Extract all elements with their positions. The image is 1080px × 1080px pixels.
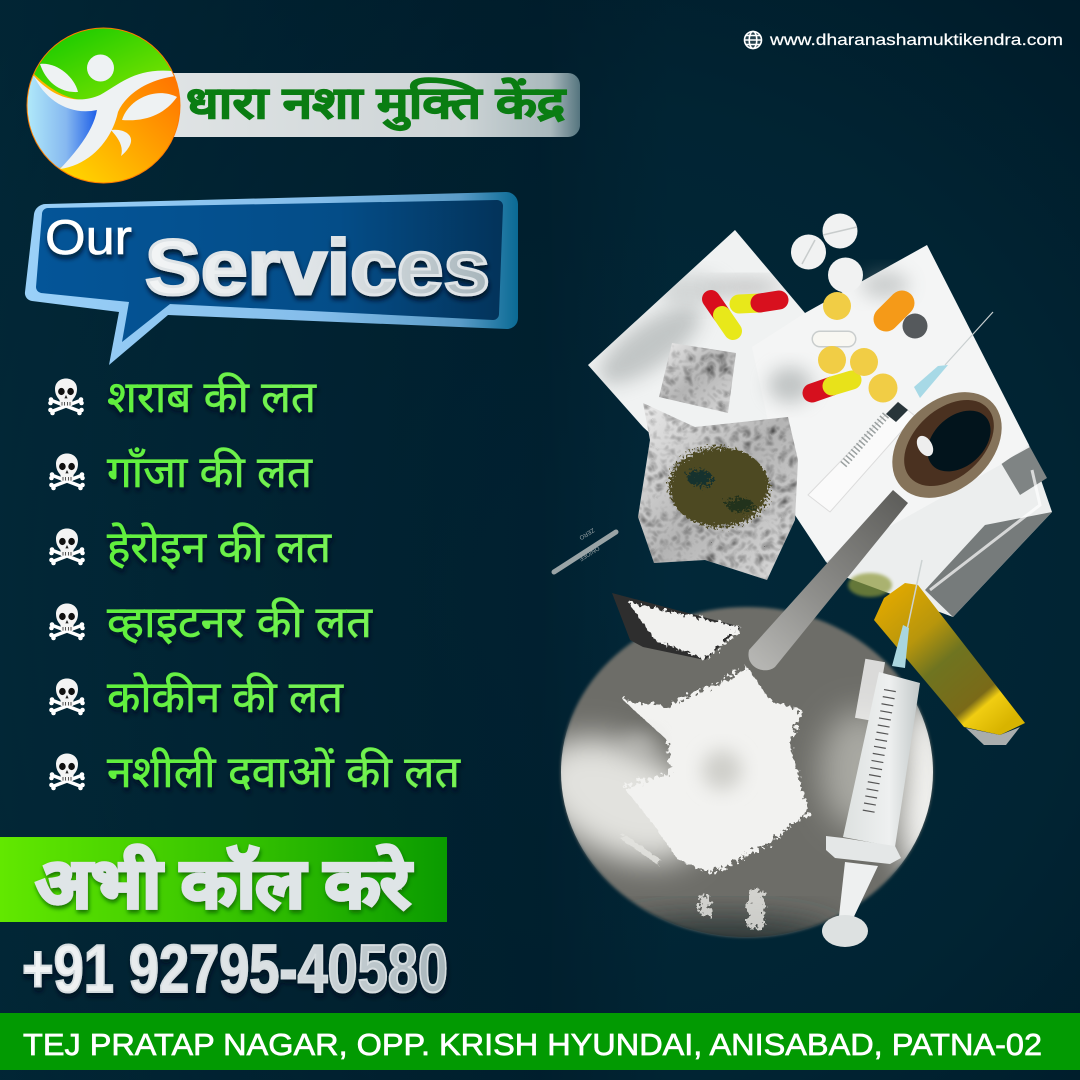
logo emblem	[26, 28, 180, 184]
lighter	[848, 573, 1025, 745]
item 1: शराब की लत	[107, 372, 317, 422]
website: www.dharanashamuktikendra.com	[769, 32, 1063, 49]
phone number: +91 92795-40580	[22, 931, 448, 1007]
call to action bar	[0, 837, 447, 922]
item 5: कोकीन की लत	[107, 672, 344, 722]
powder pile	[623, 667, 809, 873]
foil large	[638, 403, 798, 580]
capsule pills	[711, 299, 902, 393]
plastic bag	[826, 445, 1052, 617]
text: Services: Services	[145, 223, 490, 311]
powder traces	[620, 834, 764, 928]
icon: globe	[744, 32, 762, 48]
text: Our: Our	[45, 211, 132, 265]
paper: left	[588, 230, 805, 432]
digital scale: ZERO	[578, 526, 595, 540]
syringe bottom	[822, 560, 922, 947]
digital scale: ML FL.OZ	[551, 554, 577, 574]
digital scale	[551, 526, 616, 574]
paper: right	[752, 245, 1029, 562]
speech bubble heading	[25, 192, 518, 365]
item 3: हेरोइन की लत	[107, 522, 332, 572]
item 6: नशीली दवाओं की लत	[107, 747, 461, 797]
digital scale: ON/OFF	[577, 544, 600, 562]
item 2: गाँजा की लत	[107, 447, 313, 497]
logo name text: धारा नशा मुक्ति केंद्र	[186, 77, 567, 131]
address text: TEJ PRATAP NAGAR, OPP. KRISH HYUNDAI, ANISABAD, PATNA-02	[23, 1027, 1042, 1062]
foil small	[659, 343, 736, 413]
logo name banner	[160, 73, 580, 137]
item 4: व्हाइटनर की लत	[107, 597, 373, 647]
spoon	[748, 371, 1023, 670]
services list	[48, 372, 461, 797]
call text: अभी कॉल करे	[36, 845, 412, 922]
metal plate	[559, 605, 935, 939]
tablets	[791, 214, 863, 292]
herb pile	[669, 447, 769, 527]
round pills	[818, 292, 928, 402]
illustration: drugs collage	[515, 214, 1052, 962]
address bar	[0, 1013, 1080, 1070]
powder wedge	[612, 593, 741, 660]
syringe top	[808, 312, 993, 512]
